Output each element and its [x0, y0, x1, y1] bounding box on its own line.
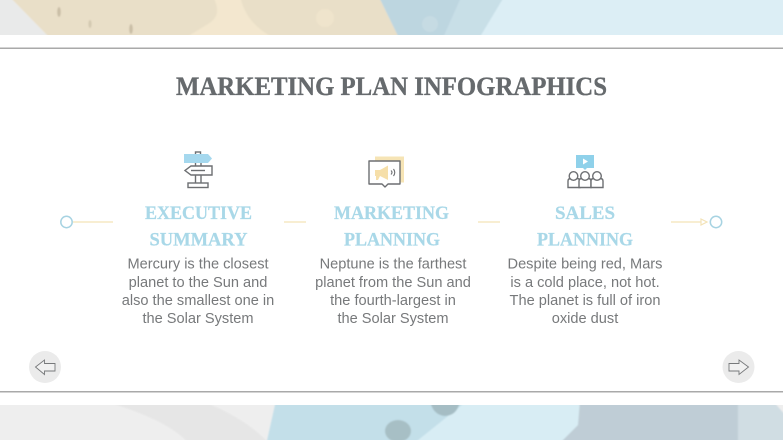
icon: audience watching video — [568, 155, 603, 188]
title: MARKETING PLAN INFOGRAPHICS — [176, 72, 607, 101]
description: the Solar System — [142, 311, 254, 327]
description: Neptune is the farthest — [320, 256, 466, 272]
heading: SUMMARY — [150, 230, 248, 250]
heading: EXECUTIVE — [145, 204, 252, 224]
description: Despite being red, Mars — [508, 256, 662, 272]
description: Mercury is the closest — [127, 256, 269, 272]
icon: megaphone speech bubble — [369, 156, 404, 187]
description: oxide dust — [552, 311, 618, 327]
next button — [722, 351, 754, 383]
bottom watercolor band — [0, 405, 783, 440]
top watercolor band — [0, 0, 783, 35]
description: the Solar System — [337, 311, 449, 327]
top divider line — [0, 48, 783, 49]
timeline connector 1 — [284, 221, 306, 223]
heading: MARKETING — [334, 204, 449, 224]
panel: sales planning — [508, 155, 662, 327]
timeline end arrow and node — [671, 216, 722, 228]
description: planet to the Sun and — [129, 275, 267, 291]
timeline start node — [61, 216, 113, 228]
panel: marketing planning — [315, 156, 471, 327]
timeline connector 2 — [478, 221, 500, 223]
bottom divider line — [0, 391, 783, 392]
heading: PLANNING — [537, 230, 633, 250]
heading: PLANNING — [344, 230, 440, 250]
description: The planet is full of iron — [510, 293, 660, 309]
description: also the smallest one in — [122, 293, 274, 309]
description: the fourth-largest in — [330, 293, 456, 309]
description: is a cold place, not hot. — [510, 275, 660, 291]
icon: signpost — [184, 152, 212, 188]
heading: SALES — [555, 204, 615, 224]
previous button — [29, 351, 61, 383]
description: planet from the Sun and — [315, 275, 471, 291]
panel: executive summary — [122, 152, 274, 327]
